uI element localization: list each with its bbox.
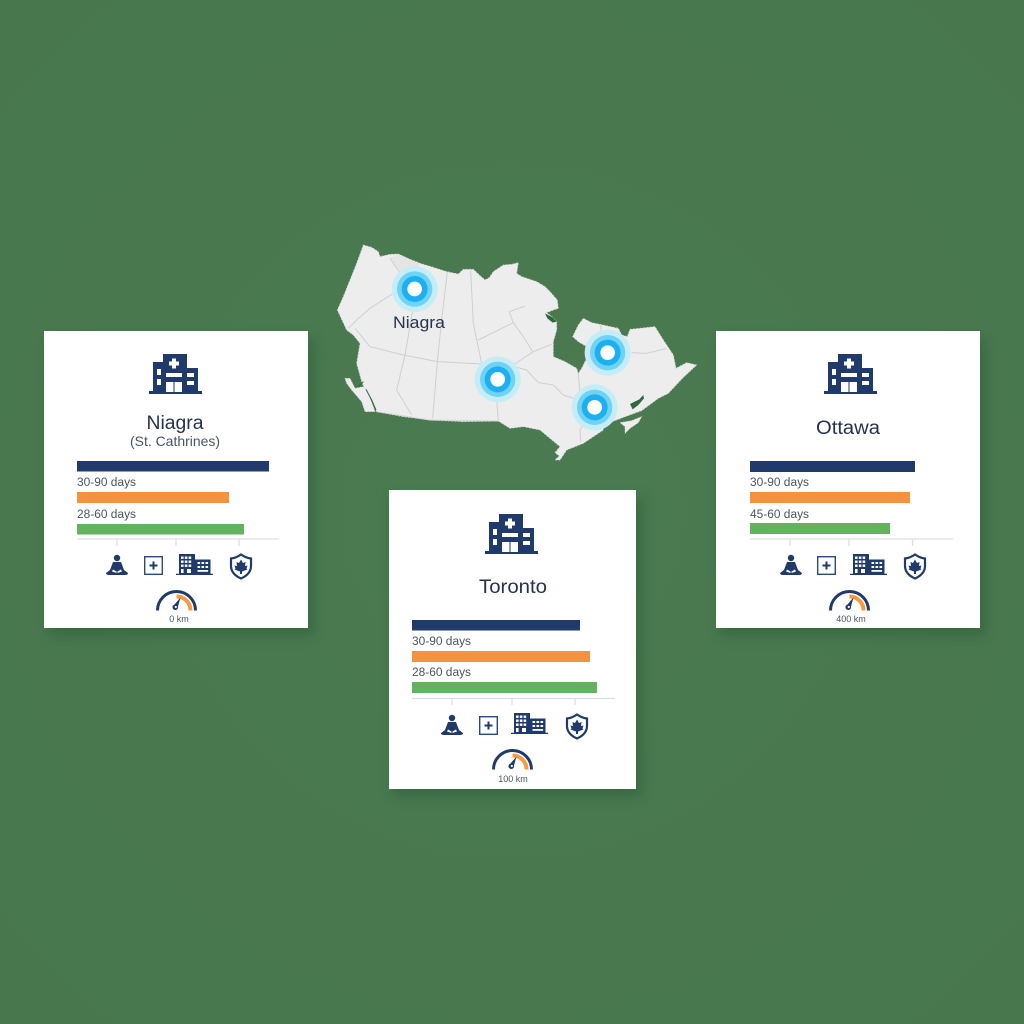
label: 30-90 days: 30-90 days xyxy=(412,636,471,648)
label: 30-90 days: 30-90 days xyxy=(77,477,136,489)
icon: person xyxy=(441,715,463,735)
icon: person xyxy=(780,555,802,575)
label: 30-90 days: 30-90 days xyxy=(750,477,809,489)
marker: north-east xyxy=(585,330,631,376)
distance label: 400 km xyxy=(836,614,866,624)
icon: buildings xyxy=(511,713,548,734)
province borders xyxy=(348,258,667,442)
icon: hospital xyxy=(824,354,877,394)
icon: maple leaf shield xyxy=(567,714,587,738)
icon: maple leaf shield xyxy=(231,554,251,578)
map landmass xyxy=(337,245,697,460)
map: provinces with location markers xyxy=(337,245,697,460)
distance label: 100 km xyxy=(498,774,528,784)
icon: gauge xyxy=(830,592,868,610)
bar: navy xyxy=(750,461,915,472)
heading: Ottawa xyxy=(816,418,880,439)
panel: Toronto xyxy=(389,490,642,797)
marker: north-west xyxy=(392,266,438,312)
icon: gauge xyxy=(494,750,532,770)
panel: Niagra xyxy=(44,331,314,636)
label: 28-60 days: 28-60 days xyxy=(412,667,471,679)
bar: navy xyxy=(412,620,580,630)
heading: Niagra xyxy=(146,413,204,434)
label: 28-60 days: 28-60 days xyxy=(77,509,136,521)
bar: orange xyxy=(412,651,590,662)
icon: maple leaf shield xyxy=(905,554,925,578)
bar: orange xyxy=(750,492,910,503)
icon: buildings xyxy=(176,554,213,575)
axis xyxy=(412,698,615,705)
distance label: 0 km xyxy=(169,614,189,624)
icon: hospital xyxy=(485,514,538,554)
bar: green xyxy=(412,682,597,693)
bar: green xyxy=(750,523,890,534)
bar: green xyxy=(77,524,244,534)
axis xyxy=(77,539,279,546)
icon: buildings xyxy=(850,554,887,575)
label: 45-60 days: 45-60 days xyxy=(750,509,809,521)
marker: south-east xyxy=(572,384,618,430)
icon: hospital xyxy=(149,354,202,394)
panel: Ottawa xyxy=(716,331,986,636)
bar: navy xyxy=(77,461,269,472)
icon: medical plus xyxy=(818,557,835,574)
map label: Niagra xyxy=(393,313,446,332)
icon: medical plus xyxy=(145,557,162,574)
icon: person xyxy=(106,555,128,575)
icon: medical plus xyxy=(480,717,497,734)
icon: gauge xyxy=(158,592,196,610)
subheading: (St. Cathrines) xyxy=(130,433,220,449)
axis xyxy=(750,539,953,546)
heading: Toronto xyxy=(479,577,547,598)
bar: orange xyxy=(77,492,229,503)
marker: centre xyxy=(475,356,521,402)
